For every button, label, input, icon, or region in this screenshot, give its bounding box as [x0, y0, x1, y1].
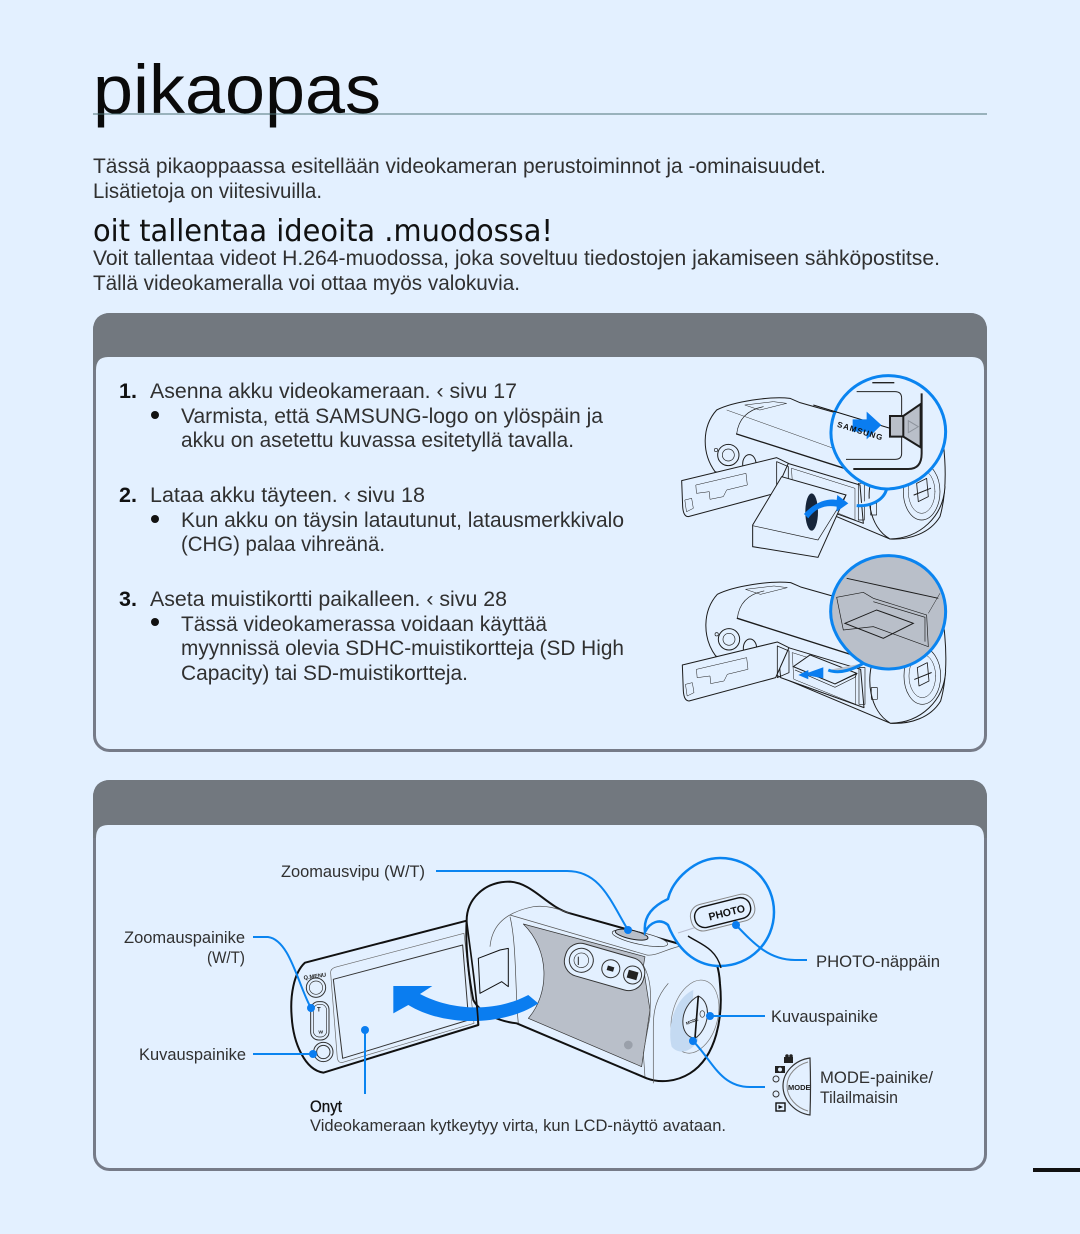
step 1 [119, 379, 603, 452]
callout dots [307, 921, 740, 1058]
camera body [466, 882, 721, 1081]
battery [753, 477, 846, 557]
label: mode button: Tilailmaisin [820, 1088, 898, 1107]
illustration: camcorder with open LCD: T [317, 1008, 321, 1014]
label: record button left: Kuvauspainike [139, 1045, 246, 1064]
panel: setup steps [93, 313, 987, 750]
step 2: Lataa akku täyteen. ‹ sivu 18 [150, 483, 425, 507]
label: zoom button [124, 928, 245, 967]
step 3: Tässä videokamerassa voidaan käyttää [181, 612, 547, 636]
gray panel [523, 924, 650, 1067]
label: screen note [310, 1097, 726, 1135]
step 2: Kun akku on täysin latautunut, latausmerkkivalo [181, 508, 624, 532]
step 1: akku on asetettu kuvassa esitetyllä tavalla. [181, 428, 574, 452]
label: mode button [820, 1068, 933, 1107]
panel header band [93, 313, 987, 370]
step 2 [119, 483, 624, 556]
intro text [93, 154, 826, 203]
panel frame [94, 314, 986, 750]
label: mode button: MODE-painike/ [820, 1068, 933, 1087]
description text [93, 246, 940, 295]
illustration: camcorder with open LCD: MODE [685, 1016, 699, 1026]
label: zoom button: Zoomauspainike [124, 928, 245, 947]
illustration: camcorder with open LCD [291, 882, 727, 1083]
icon: mode dial legend: MODE [788, 1083, 810, 1092]
label: zoom button: (W/T) [207, 948, 245, 967]
illustration: inserting battery [682, 376, 946, 557]
step 1: Asenna akku videokameraan. ‹ sivu 17 [150, 379, 517, 403]
panel frame [94, 782, 986, 1170]
icon: mode dial legend [773, 1054, 810, 1115]
illustration: camcorder with open LCD: W [318, 1029, 323, 1035]
step 3: 3. [119, 587, 137, 611]
step 3: Aseta muistikortti paikalleen. ‹ sivu 28 [150, 587, 507, 611]
label: screen note: Onyt [310, 1097, 342, 1116]
memory card [793, 655, 857, 684]
callout lines [253, 871, 807, 1094]
magnifier circle [828, 556, 946, 672]
step 3: Capacity) tai SD-muistikortteja. [181, 661, 468, 685]
label: zoom lever: Zoomausvipu (W/T) [281, 862, 425, 881]
step 3: myynnissä olevia SDHC-muistikortteja (SD High [181, 636, 624, 660]
LCD door [291, 921, 478, 1073]
description text: Voit tallentaa videot H.264-muodossa, joka soveltuu tiedostojen jakamiseen sähköpostitse. [93, 246, 940, 270]
intro text: Tässä pikaoppaassa esitellään videokameran perustoiminnot ja -ominaisuudet. [93, 154, 826, 178]
photo callout bubble [645, 858, 774, 968]
panel: camera controls [93, 780, 987, 1170]
mode dial [653, 983, 668, 1083]
step 2: (CHG) palaa vihreänä. [181, 532, 385, 556]
intro text: Lisätietoja on viitesivuilla. [93, 179, 322, 203]
photo callout bubble: PHOTO [707, 903, 746, 923]
blue rotation arrow [393, 986, 538, 1021]
description text: Tällä videokameralla voi ottaa myös valokuvia. [93, 271, 520, 295]
step 1: Varmista, että SAMSUNG-logo on ylöspäin ja [181, 404, 603, 428]
step 1: 1. [119, 379, 137, 403]
zoom lever [611, 927, 669, 950]
step 2: 2. [119, 483, 137, 507]
heading: oit tallentaa ideoita .muodossa! [93, 214, 553, 249]
hinge [478, 948, 508, 993]
label: photo button: PHOTO-näppäin [816, 952, 940, 971]
magnifier circle [831, 376, 946, 506]
illustration: camcorder with open LCD: Q.MENU [303, 972, 327, 982]
page edge marker [1033, 1168, 1080, 1172]
panel header band [93, 780, 987, 838]
illustration: inserting memory card [682, 556, 946, 723]
illustration: inserting battery: SAMSUNG [836, 420, 884, 443]
buttons [561, 940, 648, 994]
label: screen note: Videokameraan kytkeytyy virta, kun LCD-näyttö avataan. [310, 1116, 726, 1135]
step 3 [119, 587, 624, 685]
title: pikaopas [93, 51, 381, 128]
label: record button right: Kuvauspainike [771, 1007, 878, 1026]
